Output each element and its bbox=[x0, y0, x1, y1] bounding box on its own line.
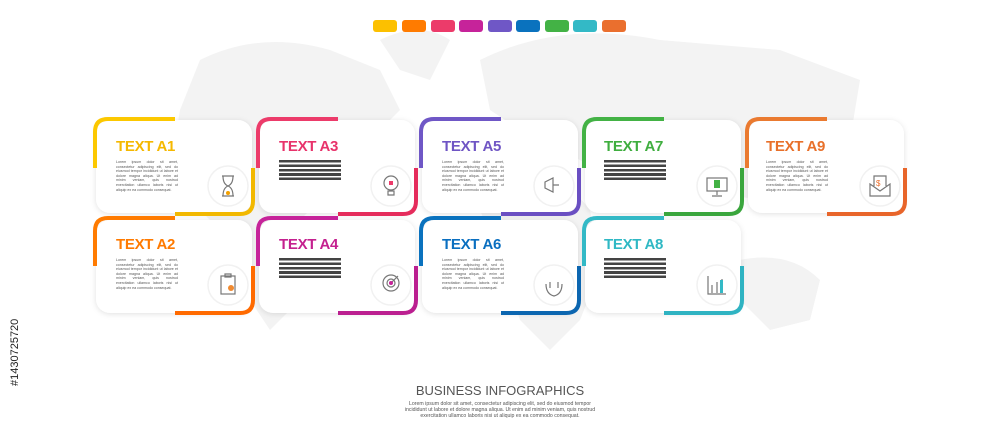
text: Lorem ipsum dolor sit amet, consectetur adipiscing elit, sed do eiusmod tempor incididunt ut labore et dolore magna aliqua. Ut enim ad minim veniam, quis nostrud exercitation ullamco laboris nisi ut aliquip ex ea commodo consequat. bbox=[442, 160, 504, 192]
color palette swatches bbox=[373, 20, 626, 32]
card A6: TEXT A6 bbox=[442, 236, 501, 253]
card A4: TEXT A4 bbox=[279, 236, 338, 253]
text: Lorem ipsum dolor sit amet, consectetur adipiscing elit, sed do eiusmod tempor incididunt ut labore et dolore magna aliqua. Ut enim ad minim veniam, quis nostrud exercitation ullamco laboris nisi ut aliquip ex ea commodo consequat. bbox=[766, 160, 828, 192]
text: Lorem ipsum dolor sit amet, consectetur adipiscing elit, sed do eiusmod tempor incididunt ut labore et dolore magna aliqua. Ut enim ad minim veniam, quis nostrud exercitation ullamco laboris nisi ut aliquip ex ea commodo consequat. bbox=[116, 160, 178, 192]
card A7: TEXT A7 bbox=[604, 138, 663, 155]
side id: #1430725720 bbox=[9, 319, 21, 386]
card A8: TEXT A8 bbox=[604, 236, 663, 253]
text: Lorem ipsum dolor sit amet, consectetur adipiscing elit, sed do eiusmod tempor incididunt ut labore et dolore magna aliqua. Ut enim ad minim veniam, quis nostrud exercitation ullamco laboris nisi ut aliquip ex ea commodo consequat. bbox=[442, 258, 504, 290]
text: Lorem ipsum dolor sit amet, consectetur adipiscing elit, sed do eiusmod tempor incididunt ut labore et dolore magna aliqua. Ut enim ad minim veniam, quis nostrud exercitation ullamco laboris nisi ut aliquip ex ea commodo consequat. bbox=[116, 258, 178, 290]
card A2: TEXT A2 bbox=[116, 236, 175, 253]
card A1: TEXT A1 bbox=[116, 138, 175, 155]
icons bbox=[221, 176, 890, 296]
card A5: TEXT A5 bbox=[442, 138, 501, 155]
card A3: TEXT A3 bbox=[279, 138, 338, 155]
card A9: TEXT A9 bbox=[766, 138, 825, 155]
footer title: BUSINESS INFOGRAPHICS bbox=[416, 383, 584, 398]
footer text: Lorem ipsum dolor sit amet, consectetur adipiscing elit, sed do eiusmod tempor incididunt ut labore et dolore magna aliqua. Ut enim ad minim veniam, quis nostrud exercitation ullamco laboris nisi ut aliquip ex ea commodo consequat. bbox=[405, 401, 595, 419]
cards graphic: $ bbox=[876, 179, 881, 188]
